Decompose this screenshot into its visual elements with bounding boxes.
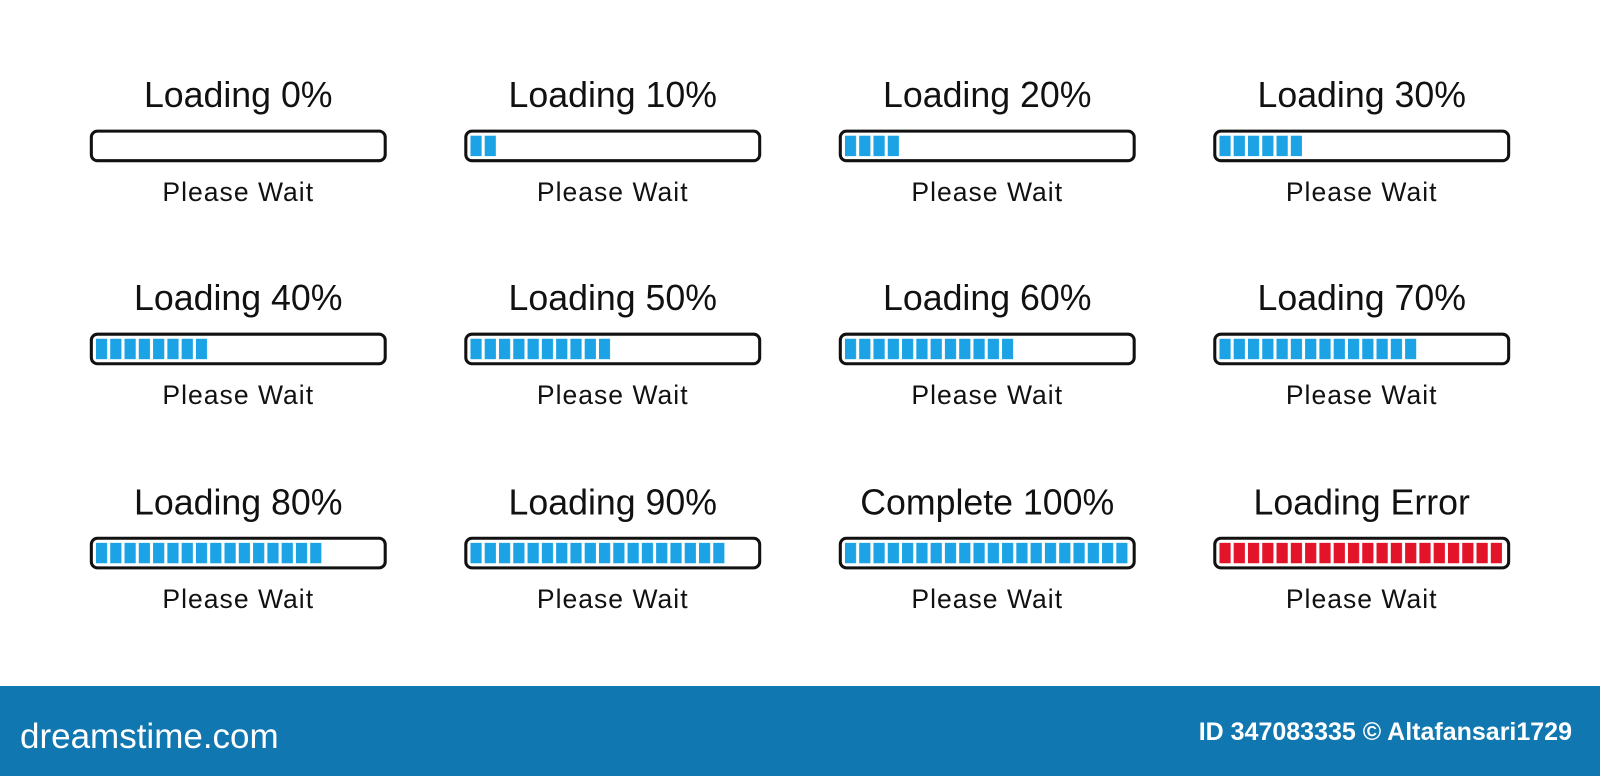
loader: 90%: Loading 90% (509, 482, 717, 522)
loader: complete 100%: Complete 100% (860, 482, 1114, 522)
loader: 40%: Please Wait (162, 380, 314, 410)
loader: 60% (840, 278, 1134, 410)
loader: 10%: Please Wait (537, 177, 689, 207)
loader: 30% (1215, 75, 1509, 207)
footer logo: dreamstime.com (20, 717, 279, 756)
loader: 60%: Please Wait (911, 380, 1063, 410)
loader: 50%: Please Wait (537, 380, 689, 410)
loader: 50% (466, 278, 760, 410)
loader: 50%: Loading 50% (509, 278, 717, 318)
loader: 30%: Loading 30% (1257, 75, 1466, 115)
loader: 80%: Loading 80% (134, 482, 342, 522)
loader: 20% (840, 75, 1134, 207)
footer banner (0, 686, 1600, 776)
loader: 60%: Loading 60% (883, 278, 1091, 318)
loader: 20%: Loading 20% (883, 75, 1091, 115)
loader: 0% (91, 75, 385, 207)
loader: 10% (466, 75, 760, 207)
loader: error: Please Wait (1286, 584, 1438, 614)
loader: 90% (466, 482, 760, 614)
loader: 0%: Please Wait (162, 177, 314, 207)
loader: 90%: Please Wait (537, 584, 689, 614)
loader grid (91, 75, 1509, 614)
footer credit: ID 347083335 © Altafansari1729 (1199, 718, 1572, 746)
loader: 70%: Loading 70% (1257, 278, 1466, 318)
loader: complete 100%: Please Wait (911, 584, 1063, 614)
loader: 70%: Please Wait (1286, 380, 1438, 410)
loader: 20%: Please Wait (911, 177, 1063, 207)
loader: complete 100% (840, 482, 1134, 614)
loader: 40%: Loading 40% (134, 278, 342, 318)
loader: 40% (91, 278, 385, 410)
loader: 80% (91, 482, 385, 614)
loader: error (1215, 482, 1509, 614)
loader: 30%: Please Wait (1286, 177, 1438, 207)
loader: 80%: Please Wait (162, 584, 314, 614)
loader: 10%: Loading 10% (509, 75, 717, 115)
loader: 0%: Loading 0% (144, 75, 333, 115)
loader: 70% (1215, 278, 1509, 410)
loader: error: Loading Error (1254, 482, 1470, 522)
